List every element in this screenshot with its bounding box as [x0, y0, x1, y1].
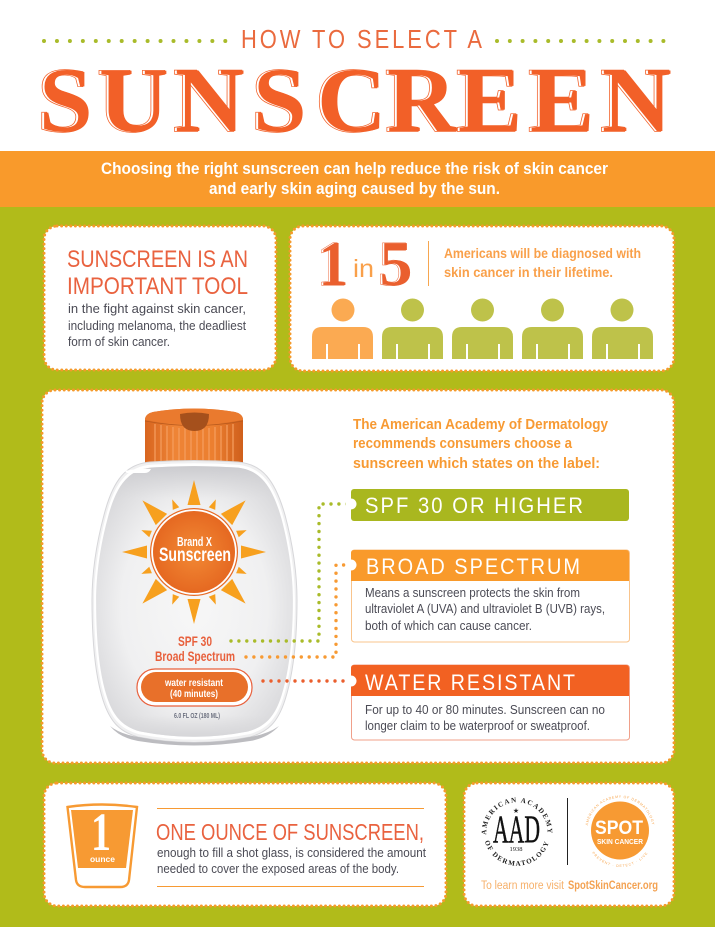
- label: water resistant pill: water resistant: [164, 678, 224, 689]
- stat: 1 in 5: 5: [378, 228, 411, 299]
- callout: broad spectrum: BROAD SPECTRUM: [366, 554, 582, 579]
- callout: broad spectrum: [346, 550, 630, 642]
- heading: sunscreen is an important tool: IMPORTANT TOOL: [67, 273, 248, 300]
- callout: water resistant: longer claim to be waterproof or sweatproof.: [365, 719, 590, 733]
- title: sunscreen: SUNSCREEN: [37, 50, 670, 151]
- logo: spot skin cancer: [586, 795, 654, 867]
- stat description: [444, 245, 641, 280]
- logo: american academy of dermatology: OF DERMATOLOGY: [485, 840, 548, 866]
- label: spf and spectrum: Broad Spectrum: [155, 648, 235, 664]
- body text: needed to cover the exposed areas of the body.: [157, 862, 399, 876]
- logo: spot skin cancer: AMERICAN ACADEMY OF DERMATOLOGY: [586, 795, 654, 826]
- logo: spot skin cancer: PREVENT · DETECT · LIVE: [592, 852, 648, 867]
- icon: sun logo: [122, 480, 266, 624]
- callout: water resistant: WATER RESISTANT: [365, 670, 577, 695]
- stat: 1 in 5: 1: [317, 228, 347, 299]
- logo: spot skin cancer: SKIN CANCER: [597, 837, 644, 846]
- body text: in the fight against skin cancer,: [68, 302, 246, 316]
- title: sunscreen: SUNSCREEN: [39, 50, 672, 151]
- bottle body: [92, 460, 297, 746]
- title: sunscreen: SUNSCREEN: [37, 50, 670, 151]
- connector: spf: [231, 504, 347, 641]
- stat description: Americans will be diagnosed with: [444, 245, 641, 261]
- callout: water resistant: [346, 665, 630, 740]
- icon: shot glass: [68, 802, 137, 887]
- panel: bottle and recommendations: [42, 390, 674, 763]
- stat: 1 in 5: 1: [318, 228, 348, 299]
- logo: american academy of dermatology: AMERICAN ACADEMY: [482, 798, 552, 835]
- callout: broad spectrum: ultraviolet A (UVA) and ultraviolet B (UVB) rays,: [365, 602, 605, 616]
- label: spf and spectrum: SPF 30: [178, 633, 212, 649]
- text: learn more link: To learn more visit: [481, 880, 565, 892]
- body text: [157, 846, 426, 876]
- panel: 1 in 5 statistic: [290, 226, 674, 371]
- icon: sunscreen bottle: [92, 408, 297, 746]
- recommendation intro: [353, 417, 608, 472]
- callout: water resistant: For up to 40 or 80 minutes. Sunscreen can no: [365, 703, 605, 717]
- heading: how to select a: HOW TO SELECT A: [241, 24, 485, 54]
- banner: intro statement: and early skin aging caused by the sun.: [209, 179, 500, 198]
- heading: one ounce of sunscreen: ONE OUNCE OF SUNSCREEN,: [156, 819, 424, 845]
- panel: one ounce: [44, 783, 446, 906]
- body text: [68, 302, 246, 349]
- icon: shot glass: 1: [91, 802, 111, 862]
- connector: broad spectrum: [246, 565, 347, 657]
- logo: american academy of dermatology: ★: [513, 807, 519, 815]
- green background: [0, 207, 715, 927]
- icon: sun logo: Brand X: [177, 534, 212, 549]
- callout: spf 30 or higher: SPF 30 OR HIGHER: [365, 493, 585, 518]
- panel: logos: [462, 782, 676, 908]
- body text: form of skin cancer.: [68, 335, 170, 349]
- logo: american academy of dermatology: [482, 798, 552, 866]
- logo: spot skin cancer: SPOT: [595, 818, 643, 839]
- stat: 1 in 5: 5: [380, 228, 412, 299]
- text: learn more link: [481, 880, 658, 892]
- icon: row of five people: [312, 298, 653, 359]
- label: spf and spectrum: [155, 633, 235, 664]
- text: learn more link: SpotSkinCancer.org: [568, 880, 658, 892]
- label: water resistant pill: (40 minutes): [170, 689, 218, 700]
- stat: 1 in 5: 5: [378, 228, 411, 299]
- stat: 1 in 5: 1: [317, 228, 347, 299]
- label: volume: 6.0 FL OZ (180 ML): [174, 713, 220, 720]
- callout: broad spectrum: both of which can cause cancer.: [365, 619, 532, 633]
- connector: water resistant: [263, 679, 347, 683]
- label: water resistant pill: [137, 669, 252, 706]
- recommendation intro: sunscreen which states on the label:: [353, 456, 600, 472]
- recommendation intro: The American Academy of Dermatology: [353, 417, 608, 433]
- banner: intro statement: Choosing the right sunscreen can help reduce the risk of skin cancer: [101, 159, 608, 178]
- stat: 1 in 5: in: [353, 255, 374, 283]
- body text: enough to fill a shot glass, is considered the amount: [157, 846, 426, 860]
- stat: 1 in 5: [317, 228, 412, 299]
- callout: broad spectrum: Means a sunscreen protects the skin from: [365, 586, 580, 600]
- body text: including melanoma, the deadliest: [68, 319, 246, 333]
- logo: american academy of dermatology: AAD: [493, 808, 540, 851]
- panel: important tool: [44, 226, 276, 370]
- recommendation intro: recommends consumers choose a: [353, 436, 573, 452]
- banner: intro statement: [0, 151, 715, 207]
- heading: sunscreen is an important tool: [67, 246, 248, 300]
- icon: sun logo: Sunscreen: [159, 545, 231, 566]
- icon: shot glass: ounce: [90, 855, 116, 864]
- heading: sunscreen is an important tool: SUNSCREEN IS AN: [67, 246, 248, 273]
- logo: american academy of dermatology: 1938: [510, 846, 522, 853]
- stat description: skin cancer in their lifetime.: [444, 264, 613, 280]
- callout: spf 30 or higher: [346, 489, 629, 521]
- bottle cap: [145, 408, 243, 464]
